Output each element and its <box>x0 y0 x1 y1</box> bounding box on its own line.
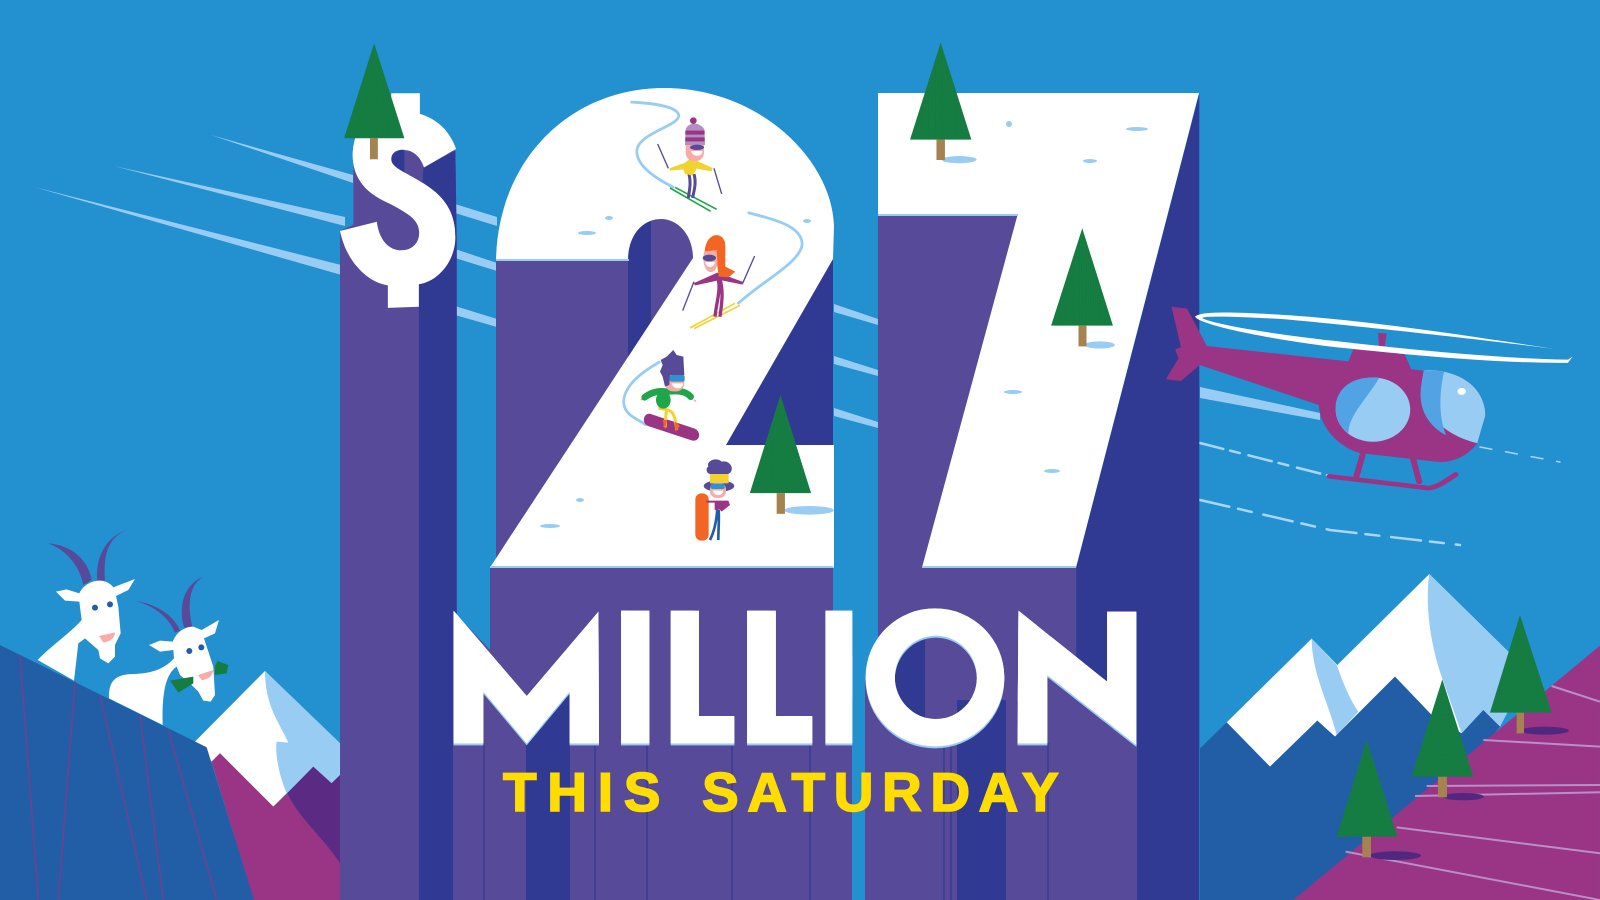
million title: L <box>660 576 737 787</box>
right slope tree B <box>1412 679 1484 800</box>
tree on dollar <box>344 43 404 159</box>
right mountains <box>1200 574 1527 900</box>
standing snowboarder <box>695 459 734 541</box>
million title: I <box>607 575 662 787</box>
numeral two column <box>490 219 833 900</box>
skier in striped hat <box>658 117 722 211</box>
skier with orange hair <box>683 235 755 329</box>
helicopter skid <box>1330 455 1456 488</box>
numeral 2: 2 <box>458 0 866 705</box>
helicopter front window <box>1421 370 1485 443</box>
numeral 7: 7 <box>862 0 1234 706</box>
subtitle this saturday: SATURDAY <box>702 761 1067 823</box>
tree on numeral 2 <box>750 395 834 515</box>
snow rims and ticks on numerals <box>490 121 1148 568</box>
subtitle this saturday: THIS <box>503 761 697 823</box>
million letter columns <box>453 611 1137 900</box>
helicopter rotor <box>1195 312 1573 363</box>
contrail streaks left and behind numerals <box>34 135 1320 428</box>
million title: I <box>812 574 865 787</box>
right slope tree C <box>1337 740 1421 860</box>
tree on numeral 7 top <box>910 42 977 163</box>
goat two <box>109 577 228 725</box>
right slope tree A <box>1490 615 1569 735</box>
right slope <box>1293 646 1600 900</box>
left cliff <box>0 645 254 900</box>
goat one <box>38 530 135 681</box>
speed lines behind helicopter <box>1200 443 1560 545</box>
million title: O <box>857 576 1013 787</box>
numeral seven column <box>878 93 1199 900</box>
dollar sign numeral: $ <box>328 58 469 327</box>
dollar column <box>340 149 457 900</box>
million title: L <box>736 574 815 786</box>
snowboarder <box>641 350 699 441</box>
helicopter fuselage <box>1166 307 1485 462</box>
tree on numeral 7 slope <box>1051 228 1115 349</box>
million title <box>454 608 1136 748</box>
million title: M <box>437 574 616 787</box>
left mountain <box>195 671 340 900</box>
ski trails <box>624 102 802 425</box>
million title: N <box>1001 575 1153 786</box>
helicopter side window <box>1336 377 1410 442</box>
helicopter <box>1166 307 1573 488</box>
